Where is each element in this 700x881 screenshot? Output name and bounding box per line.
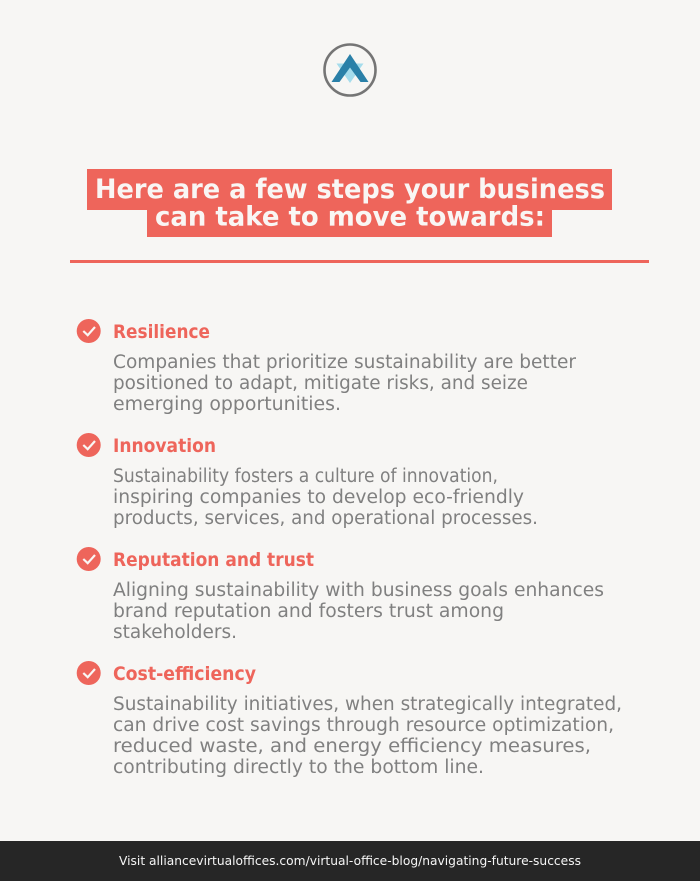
heading: Reputation and trust: Reputation and trust: [113, 549, 314, 571]
text: Reputation description: brand reputation and fosters trust among: [113, 601, 504, 622]
text: Cost-efficiency description: reduced waste, and energy efficiency measures,: [113, 736, 591, 757]
item: Reputation and trust: [77, 547, 604, 643]
text: Innovation description: inspiring companies to develop eco-friendly: [113, 487, 524, 508]
footer bar: [0, 841, 700, 881]
title: Here are a few steps your business: [95, 174, 605, 205]
text: Reputation description: [113, 580, 604, 643]
icon: check badge: [77, 433, 101, 457]
icon: check badge: [77, 661, 101, 685]
title: can take to move towards:: [155, 202, 545, 232]
text: Innovation description: products, services, and operational processes.: [113, 508, 538, 529]
item: Cost-efficiency: [77, 661, 622, 778]
item: Resilience: [77, 319, 576, 415]
text: Innovation description: Sustainability fosters a culture of innovation,: [113, 466, 498, 487]
text: Cost-efficiency description: Sustainability initiatives, when strategically integrated,: [113, 694, 622, 715]
text: Resilience description: Companies that prioritize sustainability are better: [113, 352, 576, 373]
title: [87, 169, 612, 237]
text: Reputation description: Aligning sustainability with business goals enhances: [113, 580, 604, 601]
text: Resilience description: positioned to adapt, mitigate risks, and seize: [113, 373, 528, 394]
text: Cost-efficiency description: [113, 694, 622, 778]
text: Resilience description: emerging opportunities.: [113, 394, 341, 415]
footer link text: Visit alliancevirtualoffices.com/virtual-office-blog/navigating-future-success: [119, 853, 581, 868]
logo: [324, 44, 376, 96]
text: Reputation description: stakeholders.: [113, 622, 237, 643]
text: Resilience description: [113, 352, 576, 415]
title rule: [70, 260, 649, 263]
icon: check badge: [77, 547, 101, 571]
heading: Innovation: Innovation: [113, 435, 216, 457]
item: Innovation: [77, 433, 538, 529]
text: Cost-efficiency description: contributing directly to the bottom line.: [113, 757, 484, 778]
heading: Resilience: Resilience: [113, 321, 210, 343]
text: Innovation description: [113, 466, 538, 529]
icon: check badge: [77, 319, 101, 343]
text: Cost-efficiency description: can drive cost savings through resource optimization,: [113, 715, 614, 736]
heading: Cost-efficiency: Cost-efficiency: [113, 663, 257, 685]
